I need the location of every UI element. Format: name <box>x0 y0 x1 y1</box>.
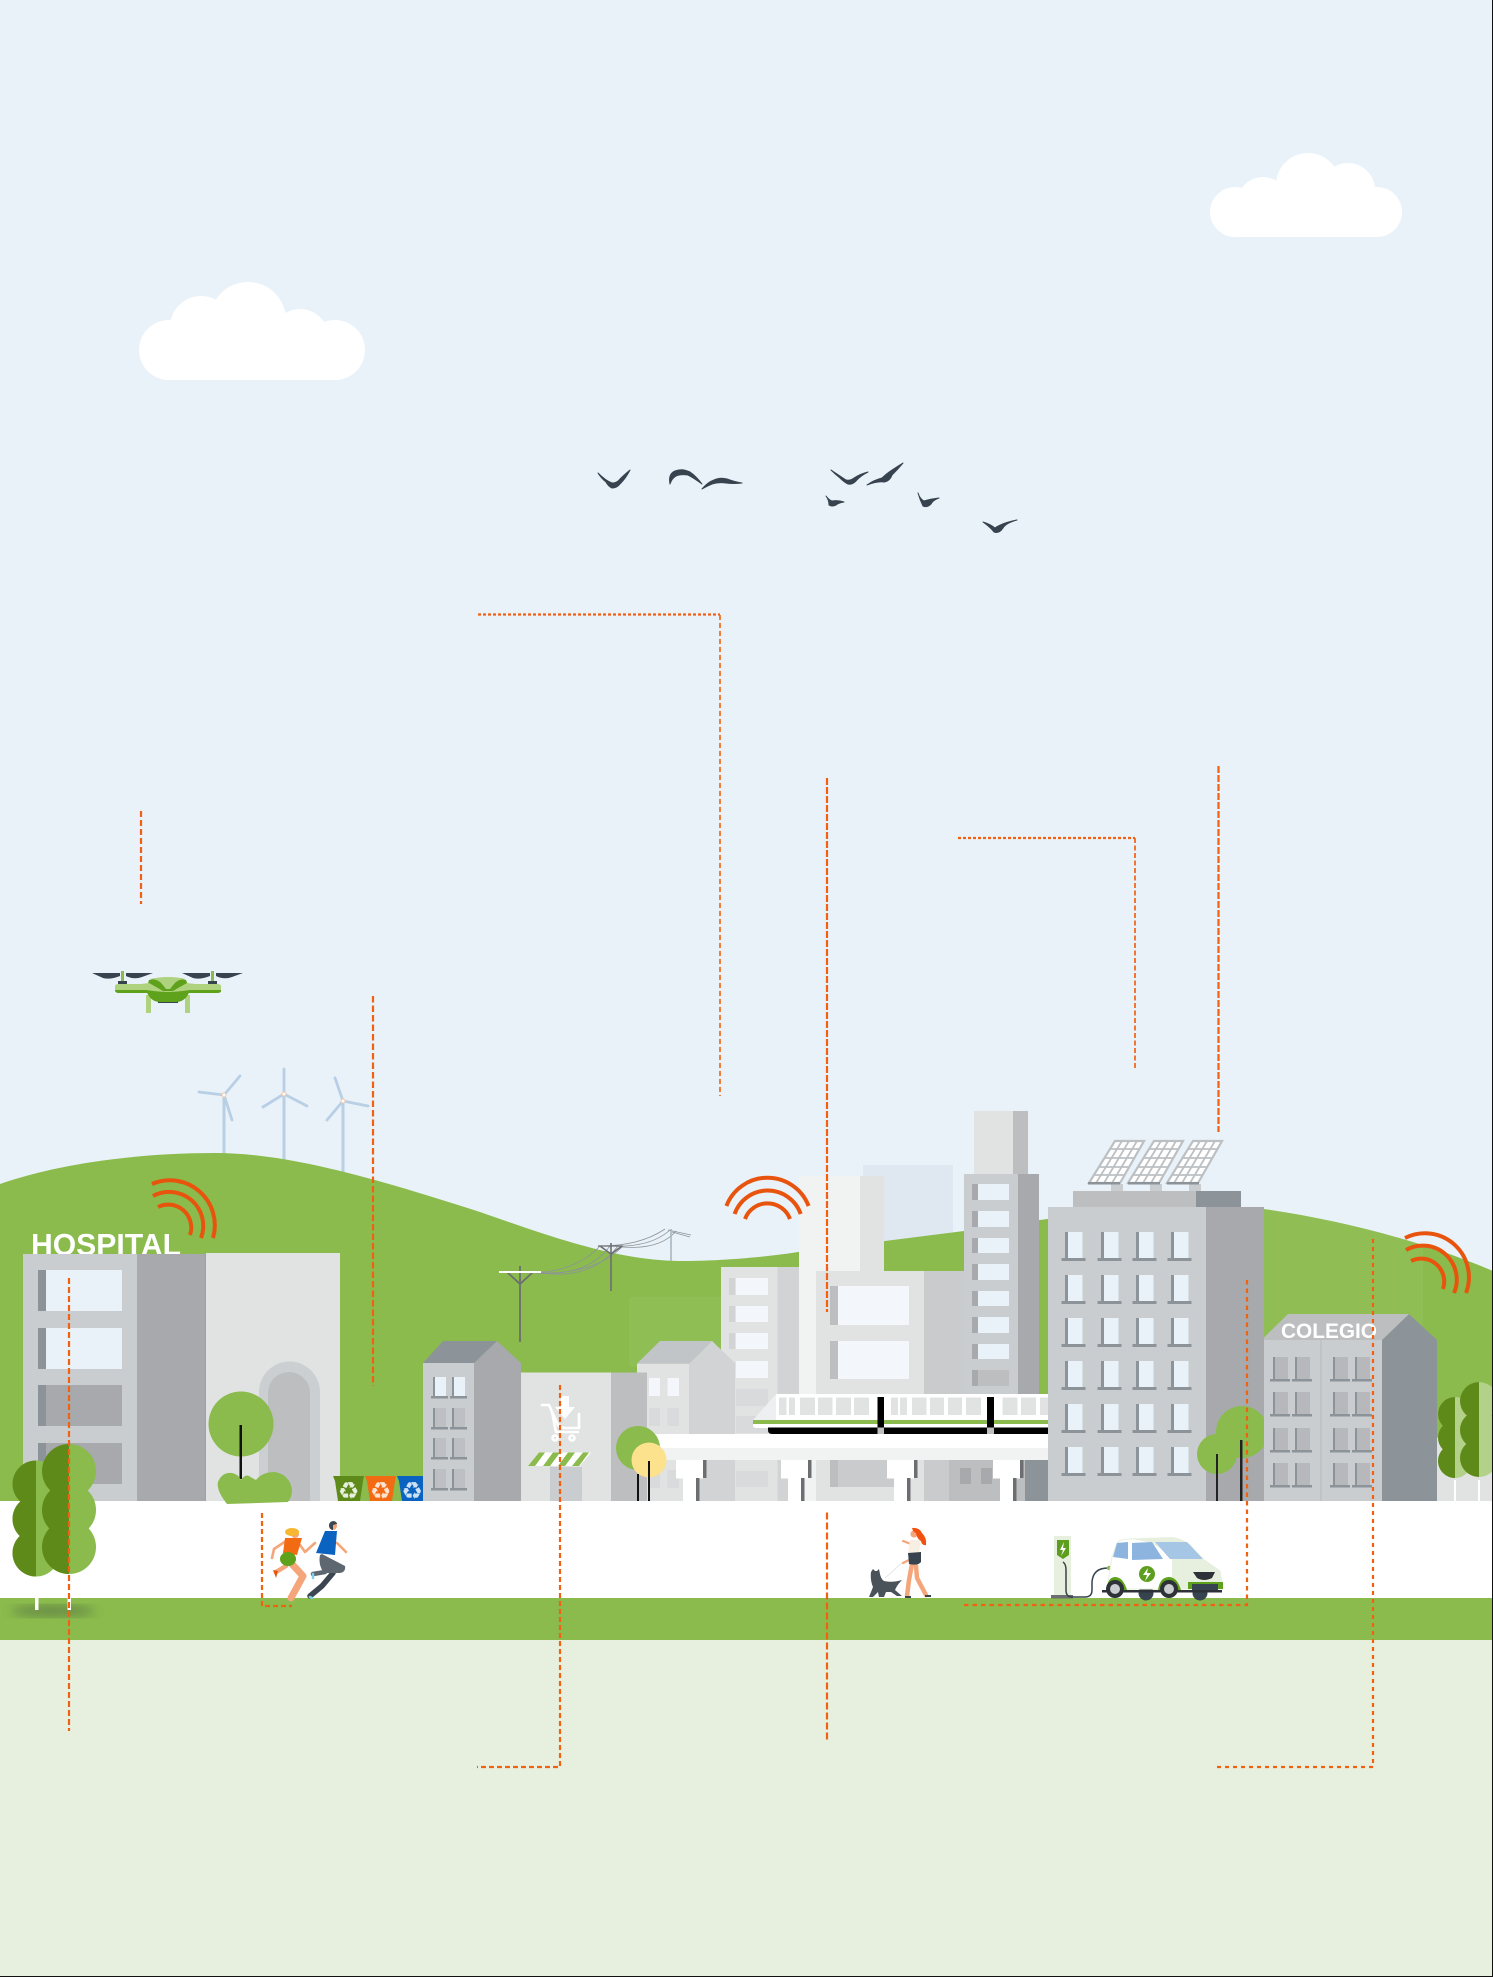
wifi signal right <box>1405 1233 1469 1293</box>
EV charging station <box>1051 1536 1111 1598</box>
tall tower behind <box>799 1176 884 1502</box>
house middle <box>637 1341 735 1502</box>
large apartment building <box>1048 1191 1264 1502</box>
trees by shop <box>616 1426 666 1502</box>
white road <box>0 1501 1493 1598</box>
small grey house <box>423 1341 521 1502</box>
solar panels <box>1088 1141 1222 1191</box>
green strip <box>0 1598 1493 1640</box>
wind turbines <box>199 1069 368 1174</box>
woman walking dog <box>869 1528 931 1598</box>
green hills <box>0 1153 1493 1510</box>
background skyscraper pale blue <box>863 1165 953 1275</box>
apartment tower light <box>721 1267 800 1502</box>
wifi signal center <box>726 1178 809 1219</box>
metro train <box>753 1394 1048 1434</box>
cloud left <box>139 282 365 380</box>
electric car <box>1102 1538 1223 1600</box>
round tree and bush <box>208 1392 292 1504</box>
wifi signal left <box>152 1180 215 1238</box>
drone <box>92 971 243 1013</box>
large trees left <box>12 1444 96 1610</box>
trees right edge <box>1438 1382 1493 1478</box>
tall grey tower <box>964 1111 1039 1502</box>
elevated viaduct <box>655 1434 1048 1502</box>
trees by apartment <box>1197 1406 1268 1502</box>
power poles and wires <box>499 1229 691 1342</box>
cloud right <box>1210 153 1402 237</box>
light building far right <box>1422 1438 1493 1502</box>
school sign: COLEGIO <box>1281 1320 1377 1343</box>
tree shadow <box>11 1605 95 1617</box>
hospital sign: HOSPITAL <box>31 1227 181 1262</box>
tower with large windows <box>816 1271 964 1502</box>
school building <box>1264 1314 1437 1502</box>
light green ground <box>0 1640 1493 1977</box>
recycling bins: ♻ <box>370 1477 391 1505</box>
faint background buildings <box>629 1178 1423 1502</box>
orange callout leader lines <box>69 614 1373 1767</box>
recycling bins <box>333 1476 427 1505</box>
recycling bins: ♻ <box>401 1477 423 1505</box>
recycling bins: ♻ <box>338 1477 359 1505</box>
flock of birds <box>598 463 1017 532</box>
runners <box>272 1521 346 1598</box>
hospital building <box>23 1253 340 1501</box>
lower block under viaduct <box>949 1460 1048 1502</box>
shop with cart icon <box>521 1372 647 1502</box>
